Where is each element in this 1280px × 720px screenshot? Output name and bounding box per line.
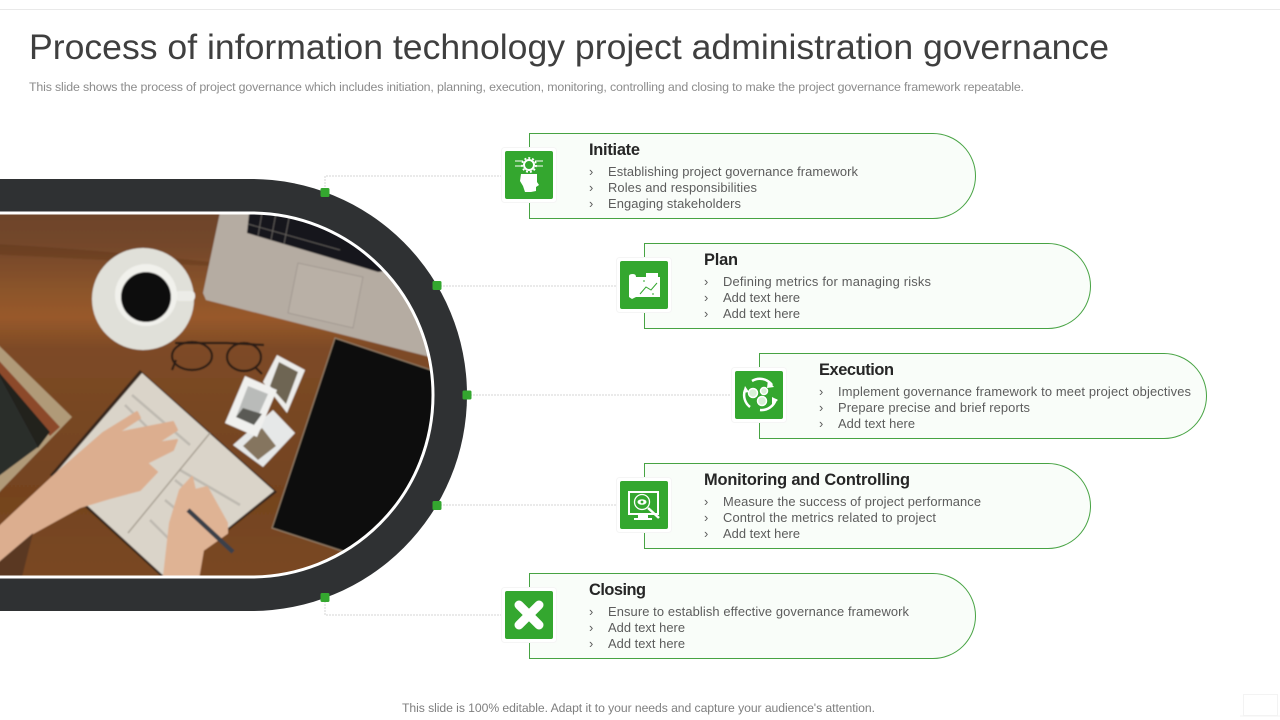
heading: Closing bbox=[589, 581, 646, 599]
icon: gear and head bbox=[515, 158, 543, 192]
bullet list: › bbox=[589, 164, 593, 179]
bullet list bbox=[589, 164, 859, 211]
title: Process of information technology project administration governance bbox=[29, 27, 1109, 67]
bullet list: › bbox=[704, 494, 708, 509]
photo white outline bbox=[0, 213, 433, 577]
bullet list bbox=[704, 494, 981, 541]
connector nodes bbox=[320, 188, 472, 602]
heading: Plan bbox=[704, 251, 738, 269]
bullet list: › bbox=[819, 384, 823, 399]
icon: faint laptop mark bbox=[1240, 694, 1280, 716]
heading: Execution bbox=[819, 361, 894, 379]
panel: execution bbox=[732, 354, 1206, 438]
icon: cross bbox=[519, 605, 539, 625]
bullet list: › bbox=[819, 400, 823, 415]
bullet list: › bbox=[704, 290, 708, 305]
bullet list: Add text here bbox=[838, 416, 915, 431]
tablet bbox=[270, 336, 432, 552]
connector lines bbox=[325, 176, 735, 615]
panel: plan bbox=[616, 244, 1090, 328]
bullet list bbox=[704, 274, 931, 321]
polaroids bbox=[225, 355, 305, 467]
bullet list: Implement governance framework to meet project objectives bbox=[838, 384, 1191, 399]
bullet list: › bbox=[589, 196, 593, 211]
hands and pen bbox=[0, 412, 233, 585]
bullet list: › bbox=[704, 274, 708, 289]
icon: cycle of gears bbox=[743, 379, 778, 410]
heading: Initiate bbox=[589, 141, 640, 159]
bullet list: Add text here bbox=[608, 620, 685, 635]
dark rounded frame bbox=[0, 179, 467, 611]
footer note: This slide is 100% editable. Adapt it to your needs and capture your audience's attention. bbox=[402, 701, 875, 715]
bullet list: Control the metrics related to project bbox=[723, 510, 936, 525]
panel: initiate bbox=[502, 134, 976, 218]
bullet list: Engaging stakeholders bbox=[608, 196, 741, 211]
coffee cup bbox=[92, 248, 195, 350]
bullet list: Prepare precise and brief reports bbox=[838, 400, 1030, 415]
notebook bbox=[50, 370, 277, 580]
glasses bbox=[172, 342, 264, 374]
icon: project map bbox=[629, 273, 660, 299]
bullet list: › bbox=[589, 620, 593, 635]
bullet list: Establishing project governance framework bbox=[608, 164, 859, 179]
bullet list: Measure the success of project performance bbox=[723, 494, 981, 509]
bullet list: › bbox=[704, 526, 708, 541]
bullet list bbox=[819, 384, 1191, 431]
bullet list: › bbox=[704, 510, 708, 525]
books bbox=[0, 346, 72, 493]
photo: desk with laptop, coffee and notebook bbox=[0, 214, 432, 576]
panel: closing bbox=[502, 574, 976, 658]
bullet list: › bbox=[819, 416, 823, 431]
icon: monitor with magnifier bbox=[629, 492, 659, 520]
heading: Monitoring and Controlling bbox=[704, 471, 910, 489]
bullet list: Add text here bbox=[723, 290, 800, 305]
bullet list: › bbox=[589, 604, 593, 619]
bullet list: Add text here bbox=[608, 636, 685, 651]
bullet list: › bbox=[589, 636, 593, 651]
subtitle: This slide shows the process of project governance which includes initiation, planning, execution, monitoring, controlling and closing to make the project governance framework repeatable. bbox=[29, 80, 1024, 94]
bullet list: Roles and responsibilities bbox=[608, 180, 757, 195]
bullet list: › bbox=[589, 180, 593, 195]
bullet list: Defining metrics for managing risks bbox=[723, 274, 931, 289]
bullet list: Ensure to establish effective governance framework bbox=[608, 604, 910, 619]
laptop bbox=[202, 214, 428, 358]
bullet list: › bbox=[704, 306, 708, 321]
bullet list bbox=[589, 604, 910, 651]
bullet list: Add text here bbox=[723, 306, 800, 321]
panel: monitoring and controlling bbox=[616, 464, 1090, 548]
bullet list: Add text here bbox=[723, 526, 800, 541]
